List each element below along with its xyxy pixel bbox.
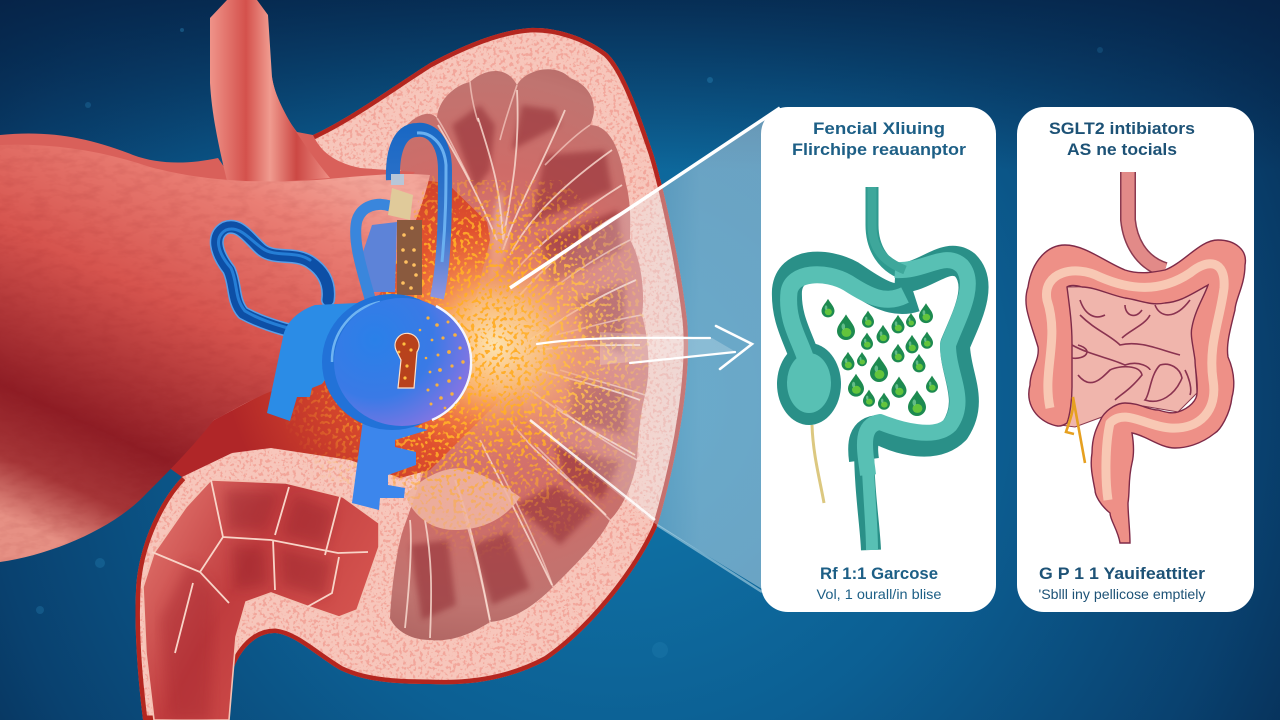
keyhole (395, 333, 419, 388)
connecting vessel and upper fold (0, 0, 415, 190)
panel heading (1049, 119, 1195, 159)
panel heading: Fencial Xliuing (813, 119, 945, 138)
panel caption: 'Sblll iny pellicose emptiely (1038, 586, 1206, 602)
icon: pink intestine (1026, 172, 1245, 543)
panel caption (1038, 565, 1206, 602)
gold sparks on lock (419, 316, 465, 409)
arrow toward panels (537, 326, 752, 369)
central hilum (168, 180, 500, 478)
kidney cortex and red capsule (135, 28, 688, 720)
glucose burst (290, 176, 649, 551)
lock body (322, 294, 471, 430)
shackle cap and gold cylinder (388, 174, 413, 220)
panel heading (792, 119, 966, 159)
lower kidney tube lobes (143, 480, 379, 720)
panel: renal glucose (teal intestine) (761, 107, 996, 612)
panel caption: G P 1 1 Yauifeattiter (1039, 565, 1206, 583)
left key head (267, 303, 357, 421)
lock and keys (217, 130, 471, 510)
projection beam to panels (510, 108, 780, 600)
liver-like organ (0, 140, 440, 570)
medulla pyramids (390, 69, 648, 640)
panel card (761, 107, 996, 612)
shackle loops (356, 130, 446, 302)
left key ring (217, 227, 328, 337)
panel caption: Rf 1:1 Garcose (820, 565, 938, 583)
rear key teeth (362, 222, 397, 292)
panel heading: AS ne tocials (1067, 140, 1177, 159)
icon: teal intestine (777, 187, 974, 550)
kidney (130, 20, 700, 720)
panel caption (816, 565, 942, 602)
panel card (1017, 107, 1254, 612)
cortex speckle (130, 20, 700, 720)
panel heading: SGLT2 intibiators (1049, 119, 1195, 138)
panel caption: Vol, 1 ourall/in blise (816, 586, 942, 602)
panel heading: Flirchipe reauanptor (792, 140, 966, 159)
icon: green droplets (822, 299, 938, 416)
lower key (352, 416, 428, 510)
panel: SGLT2 inhibitors (pink intestine) (1017, 107, 1254, 612)
glass capsule (397, 220, 422, 295)
